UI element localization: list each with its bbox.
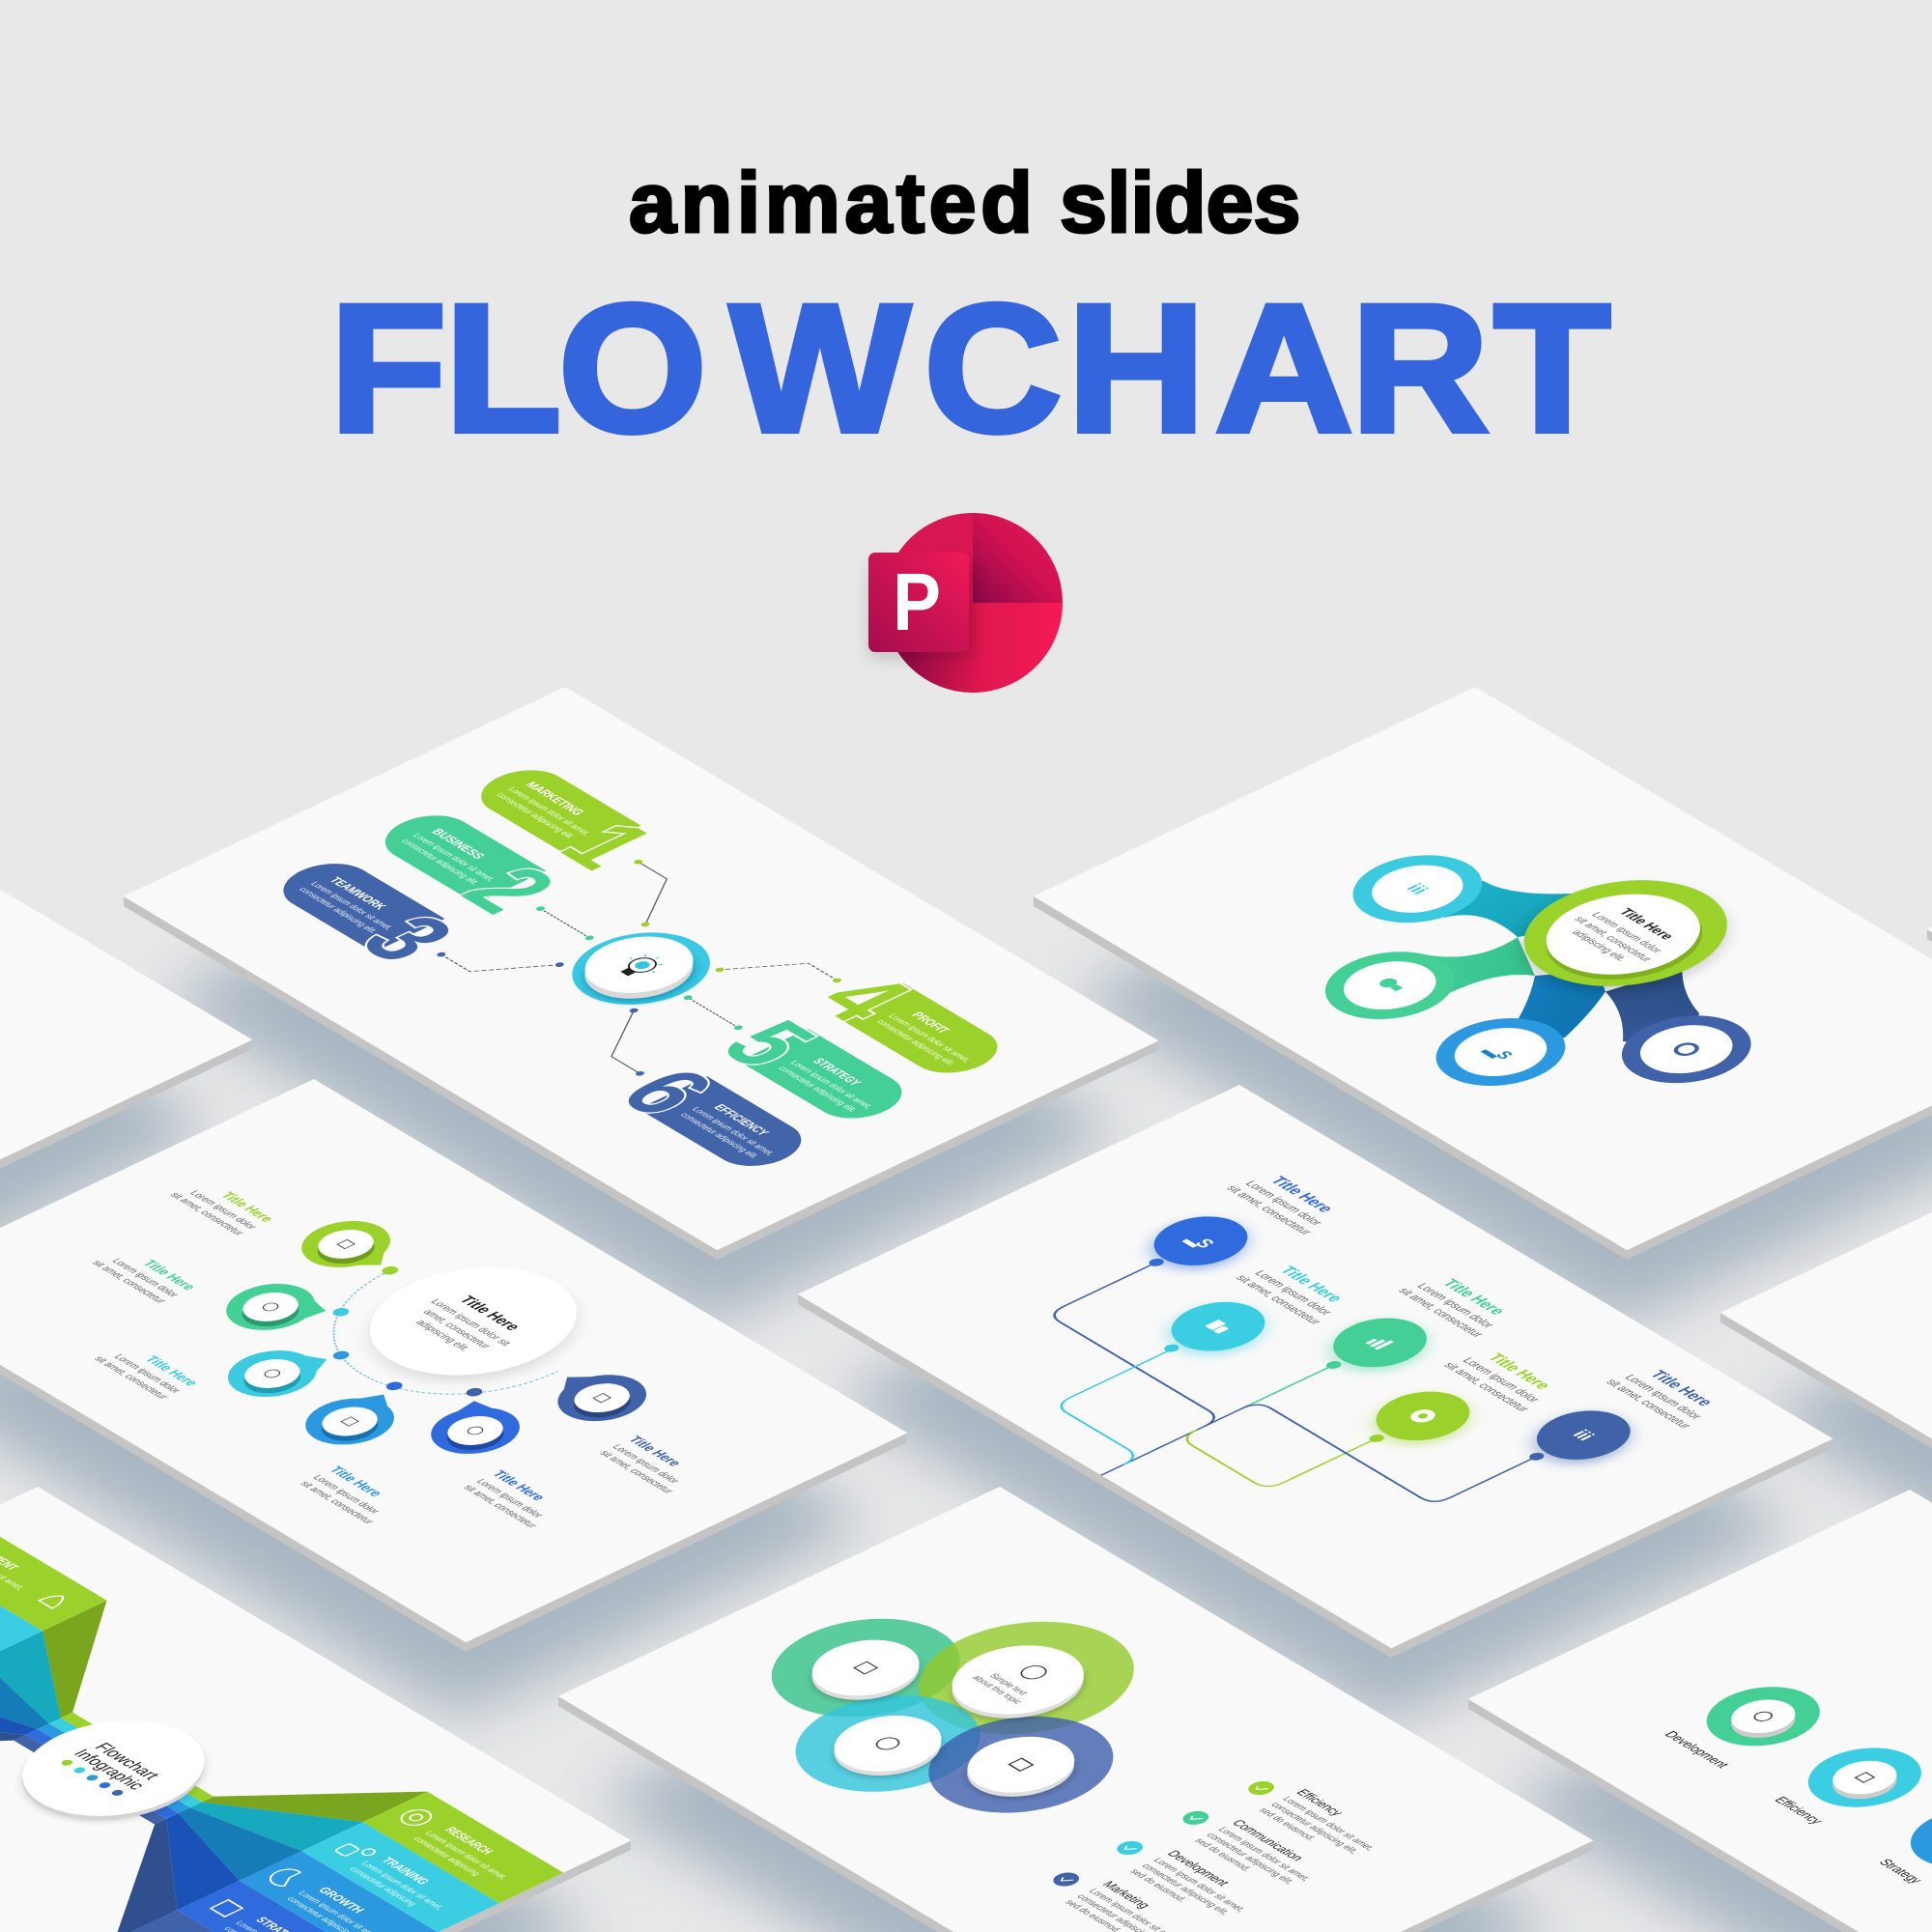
node: main green with title: Title Here [1614,907,1677,942]
card 2: business: Lorem ipsum dolor sit amet, [411,832,498,883]
label: cyan: Title Here [1275,1264,1347,1304]
panel: blank slide mid right [1720,1103,1932,1676]
inner white disc: green with text [920,1632,1116,1735]
center white disc with title: amet, consectetur [420,1308,494,1350]
right wedges [24,1738,427,1932]
node: teal [1310,1308,1448,1381]
label: cyan: sit amet, consectetur [91,1355,171,1402]
label: dark blue: Title Here [625,1435,685,1468]
label: teal: Lorem ipsum dolor [1414,1282,1497,1330]
center white disc with title: Title Here [455,1294,524,1333]
checklist: Lorem ipsum dolor sit amet, [1151,1857,1248,1914]
circle: dark blue [892,1696,1151,1833]
pin: blue [288,1382,425,1454]
card 4: profit: 4 [793,961,937,1035]
label: blue: Lorem ipsum dolor [310,1474,383,1516]
node: royal blue: S [1191,1236,1220,1251]
dotted arc [277,1271,557,1424]
label: royal blue: Lorem ipsum dolor [1242,1179,1325,1228]
label: green: sit amet, consectetur [167,1191,246,1237]
label: green: Title Here [217,1190,277,1224]
card 4: profit: Lorem ipsum dolor sit amet, [886,1012,974,1064]
inner white disc: green with text: Simple text [987,1672,1031,1696]
connectors [440,862,838,1074]
card 6: efficiency: consectetur adipiscing elit. [678,1111,762,1160]
panel: overlapping circles slide [558,1487,1593,1932]
card 1: marketing: Lorem ipsum dolor sit amet, [506,785,593,837]
node: royal blue [1131,1207,1269,1279]
panel: ring steps slide [1468,1490,1932,1932]
inner white disc: teal [784,1629,947,1714]
card 3: teamwork [244,847,481,975]
icon: PowerPoint logo [868,513,1063,693]
checklist: consectetur adipiscing elit, [1139,1862,1232,1917]
label: cyan [1233,1257,1359,1326]
band labels: Lorem ipsum dolor sit amet, [423,1830,510,1881]
label: dark blue [597,1435,708,1495]
node: teal [1299,938,1480,1033]
card 6: efficiency [596,1055,836,1185]
checklist: Marketing [1099,1880,1153,1910]
inner white disc: cyan [807,1704,969,1789]
label: green: sit amet, consectetur [1440,1361,1532,1413]
panel: branching lines slide [798,1085,1833,1658]
node: dark blue: iii [1568,1427,1600,1443]
center white disc with title [322,1245,625,1405]
ring: development: Development [1662,1729,1733,1770]
node: blue [1410,1005,1591,1099]
panel: arc of pins slide [0,1079,907,1652]
card 5: strategy: consectetur adipiscing elit. [777,1065,860,1113]
label: blue: Title Here [326,1464,386,1498]
connector dots [435,858,843,1077]
pin: teal [209,1273,343,1344]
ring: efficiency [1756,1736,1932,1833]
panel: blank slide upper left [0,686,252,1259]
checklist: consectetur adipiscing elit, [1204,1832,1296,1886]
neck strips [14,1713,213,1825]
card 4: profit [793,961,1033,1092]
node: main green with title [1478,858,1773,1013]
label: teal: Title Here [139,1258,200,1293]
card 6: efficiency: EFFICIENCY [711,1102,772,1138]
label: cyan: Lorem ipsum dolor [111,1353,184,1395]
pin: green [284,1211,416,1282]
node: main green with title: sit amet, consectetur [1571,915,1655,964]
heading: animated slides: slides [1060,155,1300,250]
center white disc with title: adipiscing elit. [412,1319,473,1353]
label: blue [297,1464,410,1526]
label: dark blue: Lorem ipsum dolor [1622,1373,1705,1421]
circle: cyan [758,1675,1017,1811]
label: royal blue [1223,1167,1350,1236]
circle: teal [734,1599,998,1737]
checklist: Communication [1229,1818,1307,1862]
node: cyan [1149,1292,1287,1365]
circle: green [875,1599,1177,1757]
band labels [0,1532,528,1932]
card 5: strategy [697,1007,937,1137]
arc dots [272,1264,553,1417]
checklist: Development [1164,1849,1233,1888]
card 2: business: 2 [439,853,582,926]
ring: strategy [1858,1797,1932,1894]
label: teal: sit amet, consectetur [1395,1286,1487,1339]
checklist: sed do eiusmod. [1126,1868,1189,1904]
label: blue: sit amet, consectetur [297,1480,377,1526]
label: green: Lorem ipsum dolor [186,1189,259,1232]
branch dots [1074,1242,1547,1511]
label: royal blue: sit amet, consectetur [461,1484,540,1530]
label: royal blue: Title Here [489,1468,549,1503]
checklist [1033,1770,1394,1932]
card 1: marketing: consectetur adipiscing elit. [495,791,578,840]
node: main green with title: Lorem ipsum dolor [1588,911,1664,955]
inner white disc: green with text: about this topic [970,1674,1025,1706]
node: cyan: iii [1403,881,1434,896]
panel: bow-tie infographic slide [0,1487,631,1932]
necks [1312,849,1771,1099]
label: royal blue: Title Here [1266,1175,1337,1215]
ring: strategy: Strategy [1876,1857,1926,1886]
card 2: business: BUSINESS [428,827,488,861]
node: cyan [1327,841,1508,937]
label: royal blue: sit amet, consectetur [1223,1183,1315,1236]
card 6: efficiency: Lorem ipsum dolor sit amet, [690,1105,778,1156]
panel: metaball flowchart slide [1034,687,1932,1260]
card 6: efficiency: 6 [596,1055,740,1128]
band labels: TRAINING [378,1856,433,1887]
band labels: RESEARCH [441,1825,497,1856]
label: dark blue [1603,1361,1729,1431]
checklist: consectetur adipiscing elit, [1267,1801,1361,1856]
band labels: consectetur adipiscing [412,1835,483,1877]
card 2: business: consectetur adipiscing elit. [399,838,482,886]
label: dark blue: sit amet, consectetur [1603,1378,1694,1431]
panel: blank slide far right [1927,720,1932,1283]
center white disc with title: Lorem ipsum dolor sit [427,1297,513,1348]
card 3: teamwork: Lorem ipsum dolor sit amet, [308,880,396,931]
band labels: GROWTH [315,1886,368,1915]
branch lines [926,1248,1537,1580]
card 5: strategy: Lorem ipsum dolor sit amet, [788,1059,875,1110]
card 1: marketing: 1 [536,809,680,882]
label: dark blue: Lorem ipsum dolor [610,1443,682,1486]
checklist: Lorem ipsum dolor sit amet, [1215,1826,1313,1883]
card 5: strategy: STRATEGY [810,1056,865,1088]
label: royal blue [461,1468,572,1530]
label: teal [89,1244,200,1305]
node: dark blue [1596,1002,1776,1097]
label: green [167,1177,278,1237]
pin: cyan [211,1335,347,1406]
pin: royal blue [406,1392,540,1463]
label: cyan: Title Here [142,1354,202,1388]
icon: PowerPoint logo: P [893,556,941,647]
heading: FLOWCHART: FLOWCHART [330,267,1610,469]
inner white disc: dark blue [940,1725,1102,1810]
ring: efficiency: Efficiency [1771,1795,1827,1826]
band labels: Lorem ipsum dolor sit amet, [359,1860,446,1911]
checklist: sed do eiusmod. [1256,1806,1319,1842]
center disc: Infographic [70,1747,150,1792]
card 4: profit: consectetur adipiscing elit. [874,1018,958,1066]
label: teal: Lorem ipsum dolor [109,1258,182,1299]
node: main green with title: adipiscing elit. [1569,928,1630,963]
label: teal: Title Here [1438,1277,1509,1318]
left wedges [0,1601,196,1802]
card 1: marketing [442,753,680,882]
node: dark blue [1514,1401,1652,1473]
label: royal blue: Lorem ipsum dolor [473,1478,546,1520]
node: green [1353,1381,1492,1455]
label: cyan [91,1340,202,1402]
node: blue: S [1492,1049,1517,1062]
label: green: Title Here [1484,1351,1554,1392]
label: cyan: Lorem ipsum dolor [1252,1269,1335,1317]
label: dark blue: sit amet, consectetur [597,1450,676,1495]
card 2: business [347,799,582,926]
center disc [0,1701,247,1842]
panel: numbered flowchart slide [124,687,1158,1260]
label: cyan: sit amet, consectetur [1233,1273,1324,1326]
card 3: teamwork: 3 [336,901,481,975]
checklist: sed do eiusmod. [1191,1837,1254,1873]
card 5: strategy: 5 [697,1007,841,1080]
checklist: Efficiency [1293,1787,1347,1818]
label: dark blue: Title Here [1646,1368,1717,1408]
heading: animated slides: animated [629,155,1037,250]
slide drop shadows [0,803,1932,1932]
card 3: teamwork: TEAMWORK [327,875,390,912]
card 1: marketing: MARKETING [523,780,587,817]
ring: development [1654,1675,1842,1773]
label: green: Lorem ipsum dolor [1460,1356,1543,1405]
pin: dark blue [532,1360,664,1431]
right bands [115,1792,563,1932]
checklist: Lorem ipsum dolor sit amet, [1279,1796,1377,1852]
band icons [0,1591,442,1920]
card 4: profit: PROFIT [908,1010,953,1036]
label: teal: sit amet, consectetur [89,1260,168,1305]
band labels: consectetur adipiscing [348,1865,419,1907]
card 3: teamwork: consectetur adipiscing elit. [297,886,381,934]
label: green [1440,1344,1567,1413]
central hub with bulb icon [545,918,738,1019]
label: teal [1395,1269,1521,1339]
center disc: Flowchart [91,1740,165,1782]
left bands [0,1519,107,1748]
